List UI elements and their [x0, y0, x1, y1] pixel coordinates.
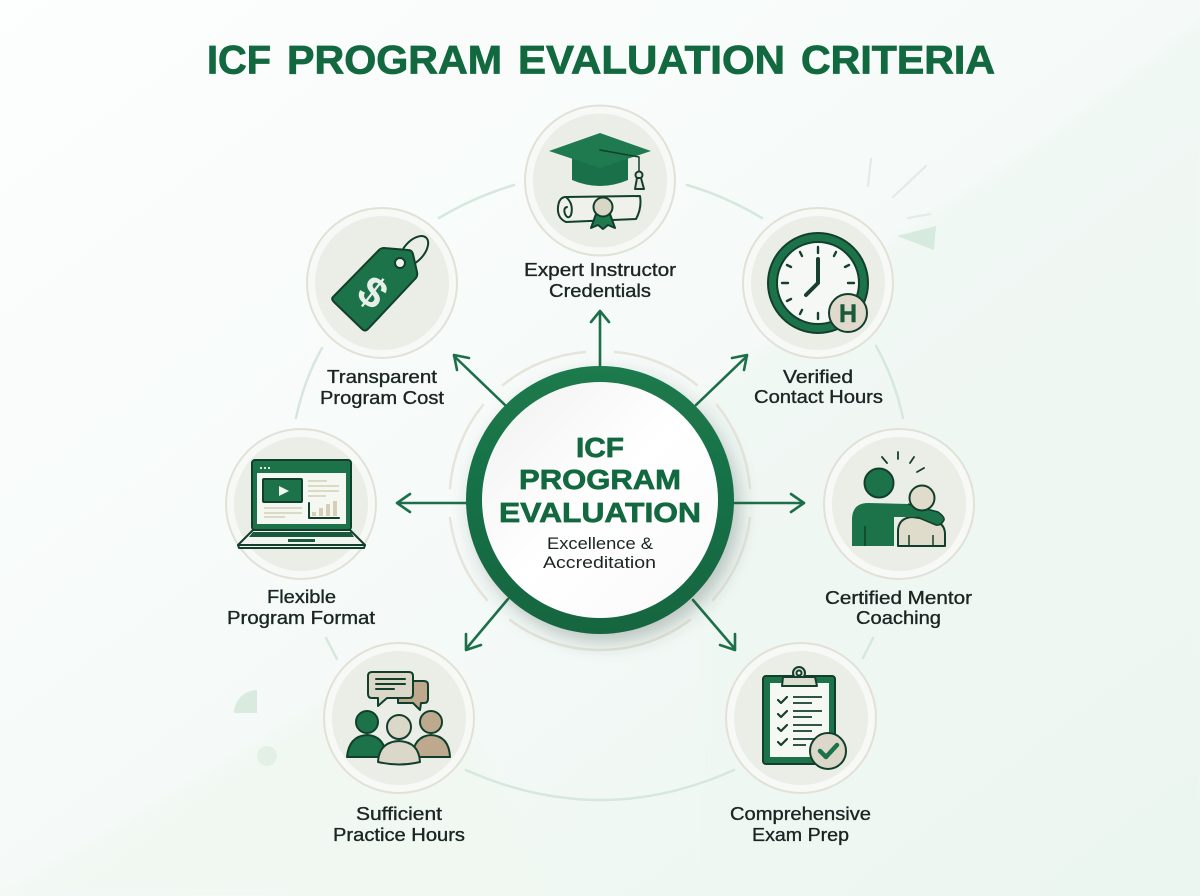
central hub [466, 366, 734, 634]
label: Practice Hours [333, 825, 465, 845]
decorative accents: shapes lower left [234, 690, 277, 766]
arrow: to Comprehensive Exam Prep [693, 600, 735, 650]
label [730, 804, 871, 845]
panel: Sufficient Practice Hours [324, 643, 474, 845]
label [754, 367, 883, 407]
hub heading: ICF [576, 432, 624, 463]
label [825, 588, 972, 628]
title: EVALUATION [518, 38, 785, 82]
hub subtitle: Accreditation [543, 554, 656, 572]
outer connector arcs [296, 185, 903, 800]
label: Contact Hours [754, 387, 883, 407]
arrow: to Expert Instructor Credentials [591, 311, 609, 368]
hub subtitle [543, 535, 656, 572]
icon: laptop with video [238, 460, 365, 548]
label [320, 367, 444, 408]
title: CRITERIA [801, 38, 995, 82]
hub subtitle: Excellence & [547, 535, 653, 553]
panel: Transparent Program Cost [307, 208, 457, 408]
title: ICF [207, 38, 271, 82]
label: Program Format [227, 608, 375, 628]
label: Coaching [856, 608, 941, 628]
label: Comprehensive [730, 804, 871, 824]
label: Exam Prep [752, 825, 849, 845]
arrow: to Sufficient Practice Hours [466, 599, 508, 650]
label: Verified [783, 367, 853, 387]
icon: mentor with arm around learner [852, 452, 945, 546]
icon: price tag: $ [348, 267, 397, 319]
hub heading: PROGRAM [519, 464, 681, 495]
icon: graduation cap and diploma [549, 133, 651, 229]
label [227, 587, 375, 628]
hub heading [499, 432, 701, 528]
title [207, 38, 995, 82]
icon: price tag [332, 231, 433, 330]
label: Sufficient [356, 804, 442, 824]
label: Credentials [549, 281, 651, 301]
title: PROGRAM [287, 38, 502, 82]
icon: clipboard checklist [763, 667, 846, 769]
icon: clock with H badge: H [839, 300, 857, 328]
arrow: to Certified Mentor Coaching [733, 494, 804, 512]
arrow: to Flexible Program Format [397, 494, 467, 512]
decorative accents: burst top right [868, 159, 936, 250]
label [524, 260, 676, 301]
label: Flexible [267, 587, 336, 607]
inner ring arcs around hub [450, 352, 750, 650]
panel: Flexible Program Format [226, 429, 376, 628]
arrow: to Verified Contact Hours [696, 355, 747, 405]
panel: Verified Contact Hours [743, 208, 893, 407]
icon: group discussion [347, 672, 450, 764]
label [333, 804, 465, 845]
label: Expert Instructor [524, 260, 676, 280]
label: Transparent [327, 367, 437, 387]
icon: clock with H badge [768, 233, 868, 333]
arrow: to Transparent Program Cost [454, 355, 505, 405]
hub heading: EVALUATION [499, 497, 701, 528]
panel: Comprehensive Exam Prep [726, 643, 876, 845]
panel: Certified Mentor Coaching [824, 429, 974, 628]
label: Program Cost [320, 388, 444, 408]
label: Certified Mentor [825, 588, 972, 608]
panel: Expert Instructor Credentials [524, 106, 676, 301]
